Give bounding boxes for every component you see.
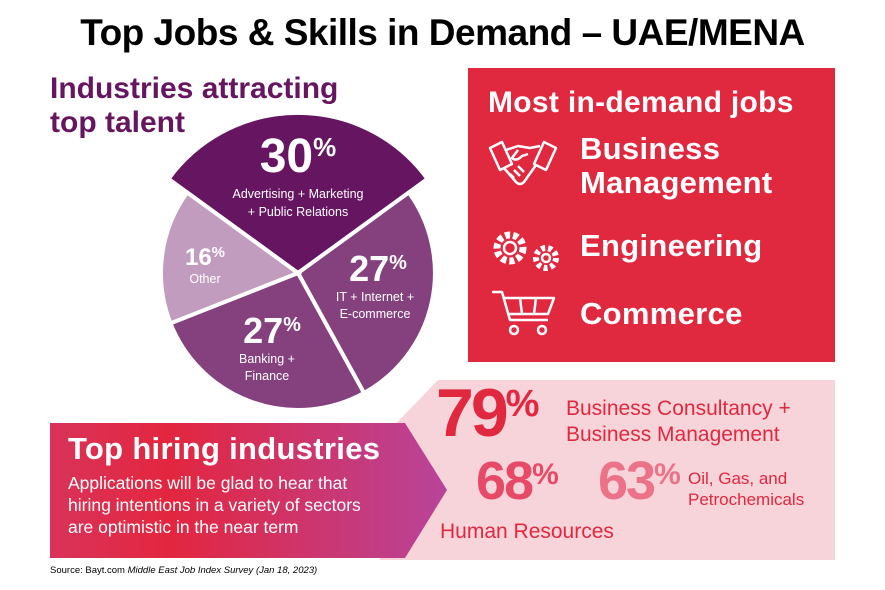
stat: 68%: 68% [476, 451, 557, 511]
hiring heading: Top hiring industries [68, 431, 380, 466]
pie chart: % [389, 252, 407, 274]
icon: shopping cart [492, 290, 556, 336]
pie chart: IT + Internet + [336, 290, 414, 304]
stat: 79%: Business Consultancy + [566, 397, 791, 420]
hiring description: Applications will be glad to hear that [68, 473, 347, 493]
pie heading: top talent [50, 106, 185, 139]
icon: handshake [488, 140, 558, 186]
stat: 63% [598, 451, 804, 511]
stat: 68% [440, 451, 614, 543]
stat: 63%: Oil, Gas, and [688, 469, 787, 488]
stat: 68%: Human Resources [440, 520, 614, 543]
pie chart: Finance [245, 369, 289, 383]
job: business management: Business [580, 131, 720, 166]
pie chart: Advertising + Marketing [233, 187, 364, 201]
hiring description: are optimistic in the near term [68, 517, 299, 537]
pie chart: % [283, 314, 301, 336]
stat: 79% [436, 375, 791, 451]
pie chart: % [212, 244, 225, 261]
jobs heading: Most in-demand jobs [488, 86, 794, 119]
icon: gears [494, 232, 559, 271]
pie chart: Banking + [239, 352, 295, 366]
pie chart: 27 [243, 310, 283, 351]
panel: most in-demand jobs [468, 68, 835, 362]
pie chart: 16 [185, 244, 212, 271]
hiring description [68, 473, 361, 537]
pie chart: + Public Relations [248, 205, 348, 219]
pie heading [50, 72, 338, 139]
pie chart: Other [189, 272, 221, 286]
stat: 63%: 63% [598, 451, 679, 511]
stat: 63%: Petrochemicals [688, 490, 804, 509]
job: commerce: Commerce [580, 296, 743, 331]
job: business management: Management [580, 165, 772, 200]
source: Source: Bayt.com Middle East Job Index Survey (Jan 18, 2023) [50, 565, 317, 576]
pie chart: % [313, 132, 336, 162]
title: Top Jobs & Skills in Demand – UAE/MENA [80, 12, 805, 53]
pie chart: 27 [349, 248, 389, 289]
stat: 79%: 79% [436, 375, 536, 451]
stat: 79%: Business Management [566, 423, 780, 446]
pie chart: 30 [260, 130, 313, 183]
pie chart: E-commerce [340, 307, 410, 321]
pie heading: Industries attracting [50, 72, 338, 105]
job: engineering: Engineering [580, 228, 762, 263]
job: business management [580, 131, 772, 200]
hiring description: hiring intentions in a variety of sectors [68, 495, 361, 515]
